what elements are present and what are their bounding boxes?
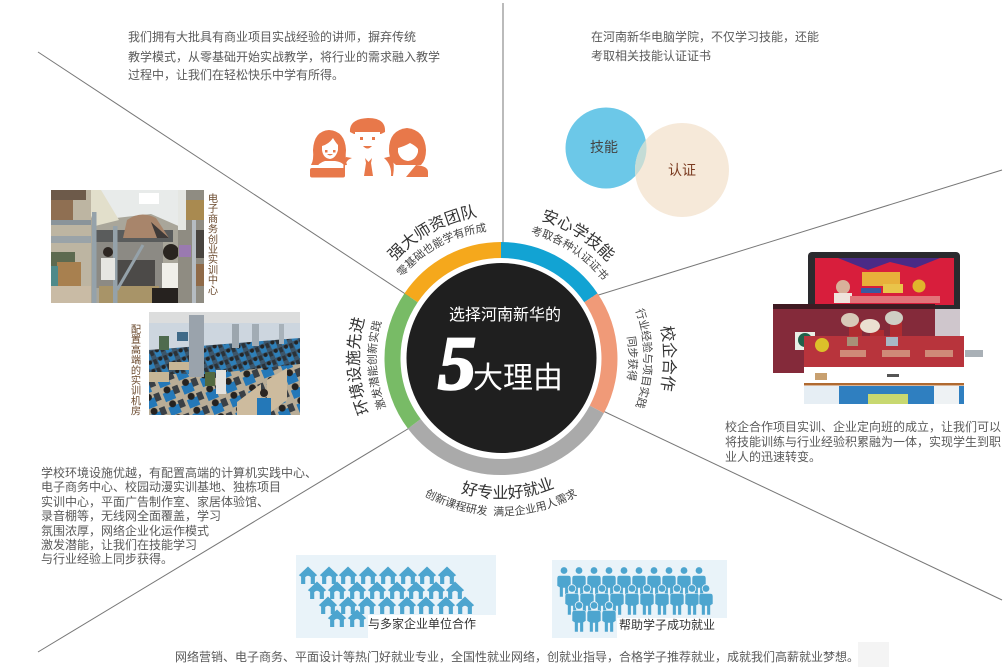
text block: enterprise cooperation: 业人的迅速转变。 [725, 449, 821, 464]
donut ring: five reason segments [392, 250, 609, 467]
curved heading: teaching team: 零基础也能学有所成 [396, 222, 486, 276]
pictogram: employed students [552, 560, 727, 638]
curved subheading: employment: 创新课程研发 满足企业用人需求 [426, 489, 577, 516]
corner block [858, 642, 889, 667]
curved heading: teaching team: 强大师资团队 [386, 204, 478, 261]
text block: teaching team: 教学模式，从零基础开始实战教学，将行业的需求融入教学 [128, 49, 440, 64]
curved heading: facilities: 环境设施先进 [346, 317, 369, 416]
curved heading: enterprise cooperation: 校企合作 [660, 326, 678, 392]
label: e-commerce training centre: 电子商务创业实训中心 [206, 192, 218, 295]
icon: three teachers [310, 118, 428, 178]
photo: e-commerce training centre [51, 190, 204, 303]
text block: teaching team: 我们拥有大批具有商业项目实战经验的讲师，摒弃传统 [128, 29, 416, 44]
centre circle with headline [406, 263, 596, 453]
curved heading: facilities [346, 317, 386, 416]
curved heading: skills: 考取各种认证证书 [532, 226, 608, 280]
pictogram: employed students: 帮助学子成功就业 [619, 617, 715, 632]
text block: campus facilities: 电子商务中心、校园动漫实训基地、独栋项目 [41, 479, 281, 494]
text block: enterprise cooperation: 校企合作项目实训、企业定向班的成立，让我们可以 [725, 419, 1001, 434]
curved heading: enterprise cooperation: 同步获得 [626, 336, 638, 380]
centre circle with headline: 大理由 [473, 362, 563, 395]
text block: campus facilities: 实训中心，平面广告制作室、家居体验馆、 [41, 494, 269, 509]
text block: campus facilities: 激发潜能，让我们在技能学习 [41, 537, 197, 552]
curved heading: enterprise cooperation: 行业经验与项目实践 [635, 308, 654, 408]
curved heading: employment: 好专业好就业 [461, 477, 554, 500]
text block: enterprise cooperation: 将技能训练与行业经验积累融为一体，实现学生到职 [725, 434, 1001, 449]
curved heading: skills: 安心学技能 [542, 210, 615, 262]
curved heading: facilities: 激发潜能创新实践 [366, 320, 386, 410]
photo: computer lab [149, 312, 300, 415]
monitor with web page collage [773, 252, 983, 404]
venn diagram: skills and certification [566, 108, 729, 217]
label: computer lab: 配置高端的实训机房 [128, 324, 141, 417]
venn diagram: skills and certification: 技能 [590, 139, 618, 155]
curved heading: enterprise cooperation [626, 308, 678, 408]
text block: employment summary: 网络营销、电子商务、平面设计等热门好就业专业，全国性就业网络，创就业指导，合格学子推荐就业，成就我们高薪就业梦想。 [175, 649, 859, 664]
text block: campus facilities: 学校环境设施优越，有配置高端的计算机实践中心、 [41, 465, 317, 480]
venn diagram: skills and certification: 认证 [668, 162, 696, 178]
text block: teaching team: 过程中，让我们在轻松快乐中学有所得。 [128, 67, 344, 82]
pictogram: partner companies [296, 555, 496, 638]
text block: campus facilities: 氛围浓厚，网络企业化运作模式 [41, 523, 209, 538]
text block: campus facilities: 录音棚等，无线网全面覆盖，学习 [41, 508, 221, 523]
text block: campus facilities: 与行业经验上同步获得。 [41, 551, 173, 566]
centre circle with headline: 5 [438, 322, 476, 406]
centre circle with headline: 选择河南新华的 [449, 306, 561, 324]
pictogram: partner companies: 与多家企业单位合作 [368, 616, 476, 631]
text block: skills and certificates: 在河南新华电脑学院，不仅学习技能，还能 [591, 29, 819, 44]
text block: skills and certificates: 考取相关技能认证证书 [591, 49, 711, 63]
curved heading: skills [532, 210, 615, 280]
